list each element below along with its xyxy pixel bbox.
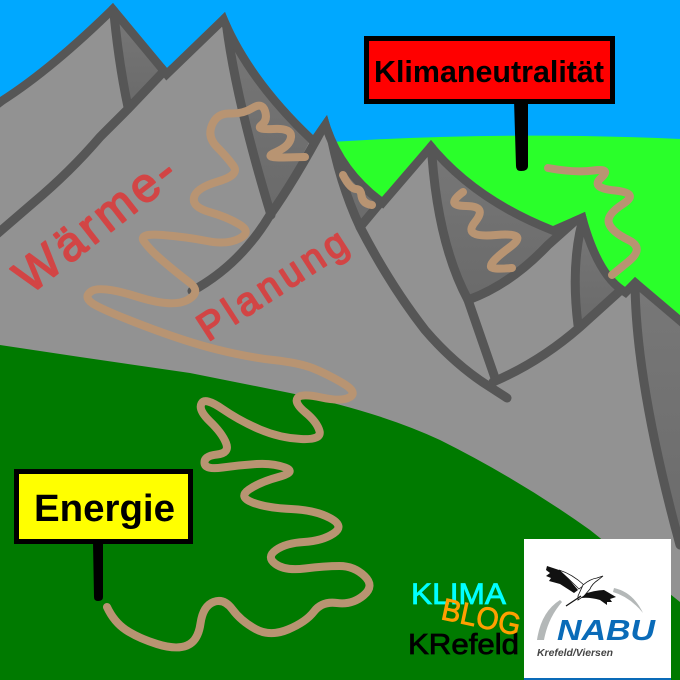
blue bottom bar	[524, 678, 671, 680]
heading: Planung: Planung	[189, 221, 355, 350]
white panel	[524, 539, 671, 680]
winding trail	[87, 106, 637, 647]
heading: Wärme-: Wärme-	[4, 145, 186, 304]
grey arcs	[537, 588, 643, 640]
stork upper wing white	[559, 570, 584, 589]
trail section to the goal sign	[548, 168, 637, 275]
trail section behind third peak	[343, 175, 372, 205]
shaded mountain faces	[113, 3, 680, 570]
KRefeld: KRefeld	[408, 629, 519, 661]
sign label: Klimaneutralität	[374, 54, 604, 89]
stork wing feathers left	[546, 566, 578, 593]
sign board	[366, 38, 612, 102]
dark green foreground	[0, 345, 680, 680]
stork	[546, 566, 616, 606]
KLIMA BLOG KRefeld wordmark	[408, 578, 524, 661]
stork legs	[566, 596, 581, 606]
main trail section	[87, 106, 370, 647]
mountain outline	[0, 3, 680, 332]
mountain ridge lines	[0, 3, 680, 545]
BLOG: BLOG	[439, 592, 524, 642]
sign post	[93, 542, 103, 601]
stork wing right	[581, 590, 616, 605]
sign board	[16, 472, 190, 542]
Krefeld/Viersen: Krefeld/Viersen	[537, 647, 613, 659]
KLIMA: KLIMA	[411, 578, 506, 611]
sign label: Energie	[34, 488, 175, 530]
NABU logo panel	[524, 539, 671, 680]
signpost: Klimaneutralität	[366, 38, 612, 171]
signpost: Energie	[16, 472, 190, 601]
NABU wordmark: NABU	[557, 615, 656, 647]
stork body and neck	[578, 576, 603, 600]
trail section across fourth peak	[454, 192, 517, 269]
sign post	[514, 100, 528, 171]
bright green distant meadow	[290, 136, 680, 400]
